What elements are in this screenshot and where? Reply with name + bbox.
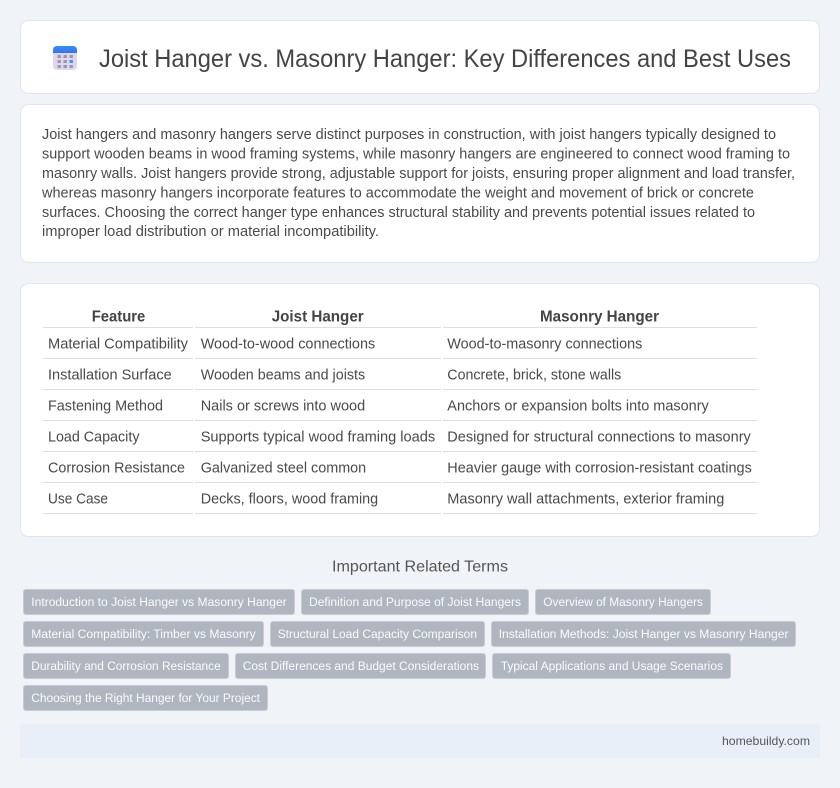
tag [24, 686, 268, 710]
footer site name: homebuildy.com [722, 734, 810, 748]
icon: calendar [53, 46, 77, 70]
tag: Definition and Purpose of Joist Hangers [309, 595, 521, 609]
table header row: Feature [92, 308, 145, 326]
tag: Structural Load Capacity Comparison [278, 627, 477, 641]
text block: introduction paragraph: support wooden beams in wood framing systems, while masonry hangers are engineered to connect wood framing to [42, 146, 790, 162]
tag [24, 622, 264, 646]
table row: installation surface [48, 368, 621, 384]
tag: Installation Methods: Joist Hanger vs Masonry Hanger [499, 627, 788, 641]
text block: introduction paragraph: surfaces. Choosing the correct hanger type enhances structural stability and prevents potential issues related to [42, 205, 755, 221]
text block: introduction paragraph: masonry walls. Joist hangers provide strong, adjustable support for joists, ensuring proper alignment and load transfer, [42, 166, 795, 182]
table header row: Joist Hanger [272, 308, 364, 326]
text block: introduction paragraph: whereas masonry hangers incorporate features to accommodate the weight and movement of brick or concrete [41, 185, 754, 201]
table row: load capacity: Designed for structural connections to masonry [447, 430, 751, 446]
table row: load capacity: Load Capacity [48, 430, 140, 446]
title: Joist Hanger vs. Masonry Hanger: Key Differences and Best Uses [99, 45, 791, 73]
tag [24, 590, 294, 614]
table row: use case: Masonry wall attachments, exterior framing [447, 492, 724, 508]
table row: installation surface: Concrete, brick, stone walls [447, 368, 621, 384]
tag: Choosing the Right Hanger for Your Project [31, 691, 261, 705]
table row: material compatibility [48, 337, 642, 353]
text block: introduction paragraph [41, 127, 795, 240]
tag: Durability and Corrosion Resistance [31, 659, 221, 673]
tag: Introduction to Joist Hanger vs Masonry Hanger [31, 595, 287, 609]
table row: load capacity: Supports typical wood framing loads [201, 430, 435, 446]
tag [492, 654, 730, 678]
tag [24, 654, 228, 678]
tag: Material Compatibility: Timber vs Masonry [31, 627, 257, 641]
text block: introduction paragraph: Joist hangers and masonry hangers serve distinct purposes in construction, with joist hangers typically designed to [42, 127, 776, 143]
table row: fastening method [48, 399, 709, 415]
table row: corrosion resistance: Heavier gauge with corrosion-resistant coatings [447, 461, 752, 477]
tag [536, 590, 710, 614]
table row: corrosion resistance: Corrosion Resistance [48, 461, 185, 477]
text block: introduction paragraph: improper load distribution or material incompatibility. [42, 224, 379, 240]
table row: material compatibility: Material Compatibility [48, 337, 189, 353]
tag [492, 622, 796, 646]
heading: important related terms: Important Related Terms [332, 558, 508, 576]
table row: fastening method: Nails or screws into wood [201, 399, 365, 415]
table row: use case [48, 492, 724, 508]
tag [302, 590, 528, 614]
table row: installation surface: Wooden beams and joists [201, 368, 365, 384]
tag: Overview of Masonry Hangers [543, 595, 703, 609]
table row: corrosion resistance: Galvanized steel common [201, 461, 366, 477]
related terms tags [24, 590, 796, 710]
tag [270, 622, 484, 646]
table row: installation surface: Installation Surface [48, 368, 172, 384]
tag [236, 654, 486, 678]
panel: comparison table [20, 284, 820, 536]
table row: fastening method: Anchors or expansion bolts into masonry [447, 399, 709, 415]
panel: header [20, 20, 820, 94]
table row: fastening method: Fastening Method [48, 399, 163, 415]
footer [20, 724, 820, 758]
table row: load capacity [48, 430, 751, 446]
table row: use case: Decks, floors, wood framing [201, 492, 378, 508]
table header row: Masonry Hanger [540, 308, 659, 326]
table row: material compatibility: Wood-to-wood connections [201, 337, 375, 353]
table header row [92, 308, 659, 326]
tag: Cost Differences and Budget Considerations [243, 659, 479, 673]
tag: Typical Applications and Usage Scenarios [501, 659, 723, 673]
panel: introduction [20, 104, 820, 262]
table row: material compatibility: Wood-to-masonry connections [447, 337, 642, 353]
table row: use case: Use Case [48, 492, 108, 508]
table row: corrosion resistance [48, 461, 752, 477]
